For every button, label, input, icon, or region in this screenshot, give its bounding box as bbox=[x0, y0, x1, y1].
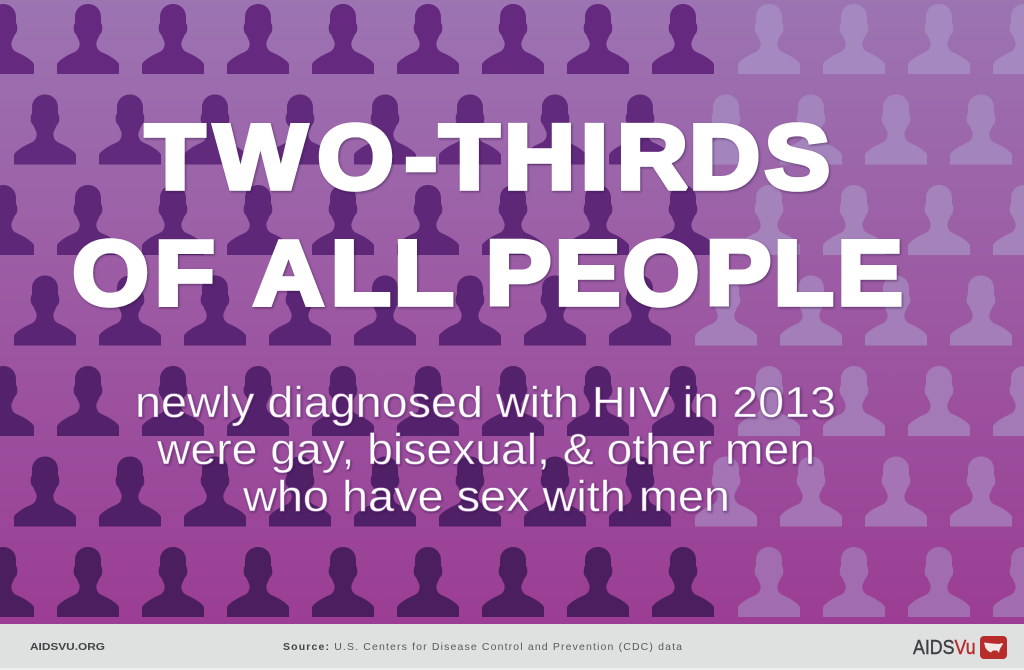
footer bar bbox=[0, 624, 1024, 670]
subtitle: newly diagnosed with HIV in 2013 bbox=[135, 378, 836, 427]
row 6 of person icons bbox=[14, 456, 1012, 526]
row 3 of person icons bbox=[0, 185, 1024, 255]
row 5 of person icons bbox=[0, 366, 1024, 436]
AIDSVu logo bbox=[913, 636, 1007, 659]
source line: Source: U.S. Centers for Disease Control and Prevention (CDC) data bbox=[283, 641, 682, 653]
row 1 of person icons bbox=[0, 4, 1024, 74]
title: OF ALL PEOPLE bbox=[72, 223, 903, 325]
row 2 of person icons bbox=[14, 94, 1012, 164]
row 4 of person icons bbox=[14, 276, 1012, 346]
footer url: AIDSVU.ORG bbox=[30, 641, 105, 653]
AIDSVu logo: AIDSVu bbox=[913, 637, 976, 659]
title bbox=[72, 107, 903, 325]
logo badge with US map bbox=[980, 636, 1007, 659]
row 7 of person icons bbox=[0, 547, 1024, 617]
subtitle bbox=[135, 378, 836, 521]
subtitle: were gay, bisexual, & other men bbox=[156, 425, 815, 474]
title: TWO-THIRDS bbox=[145, 107, 830, 209]
subtitle: who have sex with men bbox=[242, 472, 730, 521]
